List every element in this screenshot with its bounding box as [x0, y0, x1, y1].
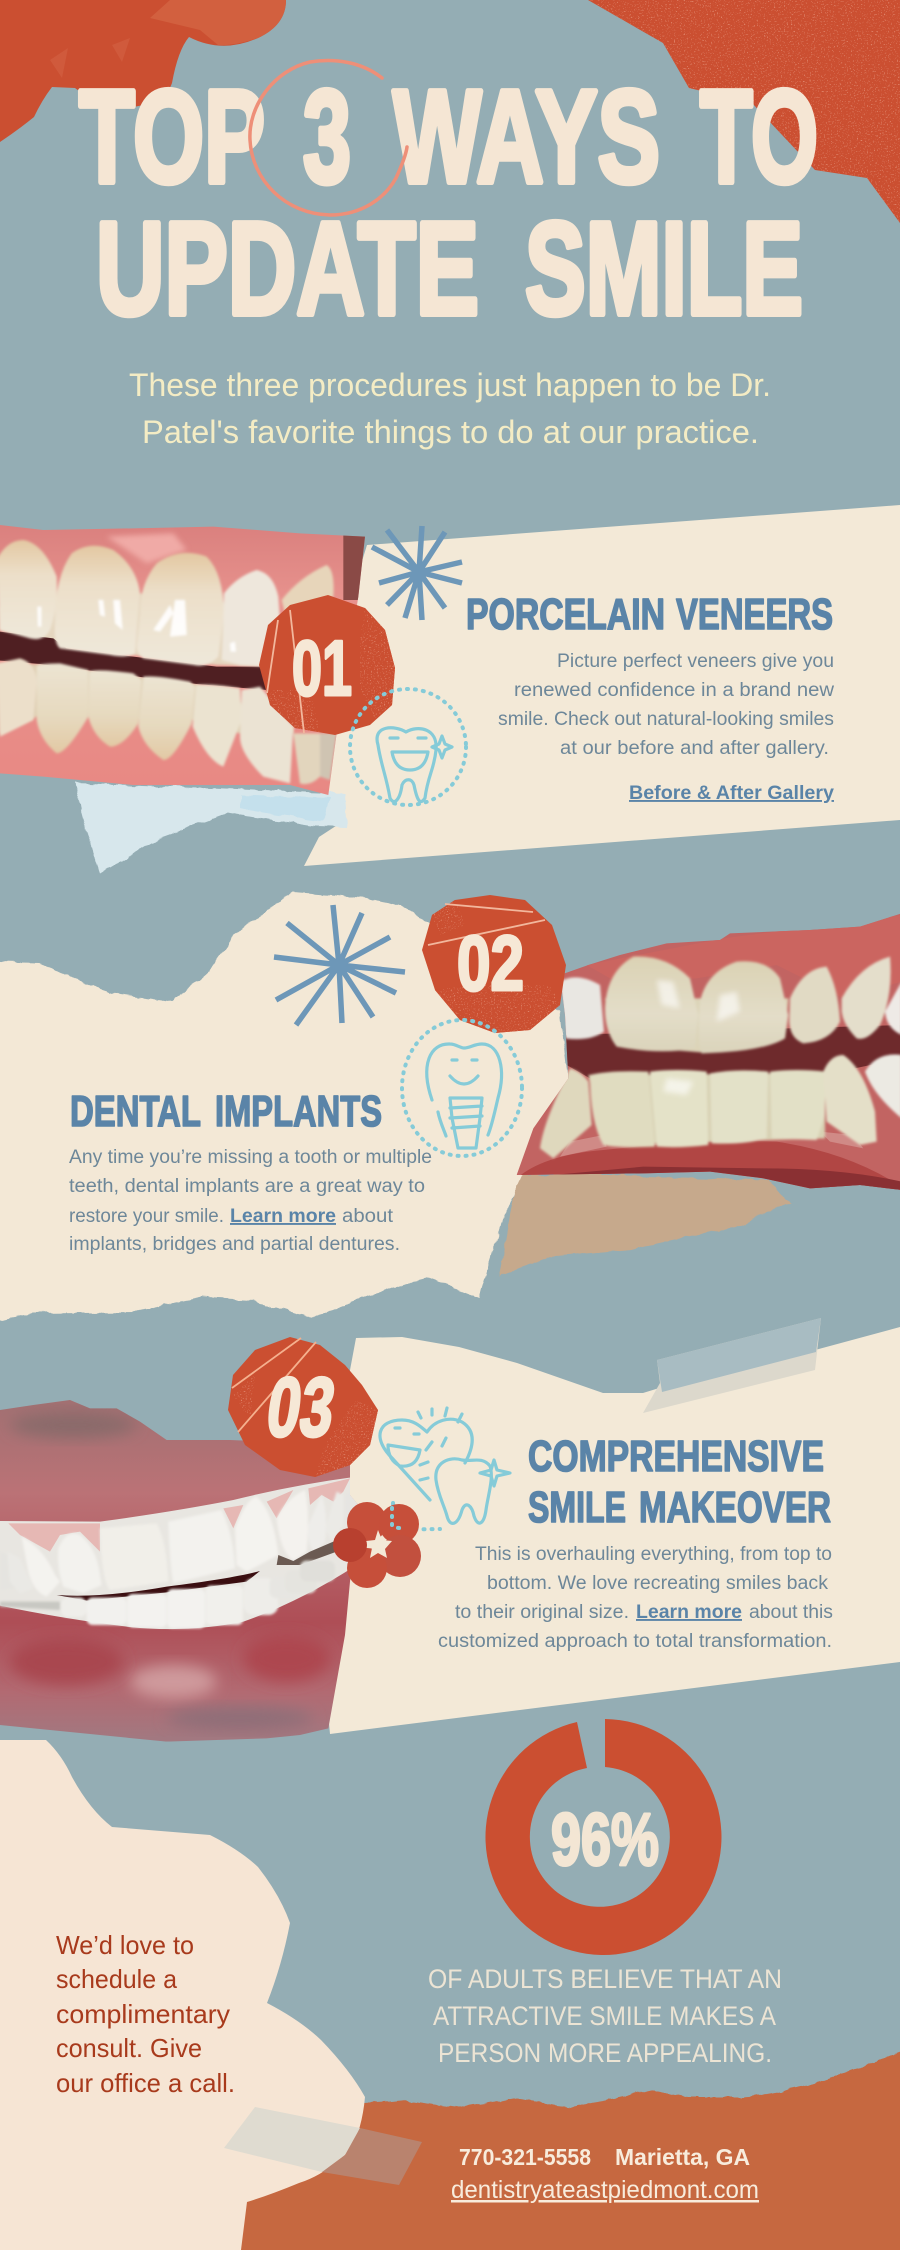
- badge 02: 02: [457, 919, 524, 1007]
- heading: dental implants: [70, 1087, 382, 1136]
- text: veneers body: smile. Check out natural-looking smiles: [498, 709, 834, 730]
- stat caption: OF ADULTS BELIEVE THAT AN: [428, 1964, 782, 1994]
- red torn shape top left: [0, 0, 286, 142]
- text: implants body: [69, 1147, 432, 1255]
- text: makeover body: customized approach to total transformation.: [438, 1631, 832, 1652]
- badge 02: [422, 895, 566, 1033]
- badge 01: [259, 595, 395, 735]
- heading: comprehensive smile makeover: [528, 1432, 831, 1532]
- link: before and after gallery: Before & After Gallery: [629, 783, 834, 804]
- text: veneers body: at our before and after gallery.: [560, 738, 829, 759]
- hand-drawn circle around 3: [250, 61, 407, 215]
- text: call to action: consult. Give: [56, 2033, 202, 2063]
- cream torn paper 2: [0, 892, 568, 1325]
- text: makeover body: Learn more: [636, 1602, 742, 1623]
- text: call to action: complimentary: [56, 1999, 230, 2029]
- text: veneers body: [498, 651, 834, 759]
- contact details: dentistryateastpiedmont.com: [451, 2176, 759, 2204]
- badge 03: [228, 1337, 378, 1477]
- title: TOP: [79, 63, 265, 210]
- text: veneers body: renewed confidence in a brand new: [514, 680, 834, 701]
- cream paper 1: [304, 505, 900, 866]
- subtitle: These three procedures just happen to be Dr.: [129, 367, 771, 403]
- donut chart 96%: 96%: [551, 1798, 659, 1881]
- text: implants body: restore your smile.: [69, 1206, 224, 1227]
- title: [79, 63, 818, 342]
- text: call to action: our office a call.: [56, 2068, 235, 2098]
- icon: smiling tooth: [350, 689, 466, 805]
- torn light blue paper: [75, 783, 347, 873]
- badge 03: 03: [261, 1360, 341, 1454]
- text: call to action: We’d love to: [56, 1930, 194, 1960]
- heading: comprehensive smile makeover: SMILE: [528, 1483, 626, 1532]
- icon: heart and tooth: [380, 1408, 510, 1529]
- stat caption: ATTRACTIVE SMILE MAKES A: [433, 2001, 776, 2031]
- text: makeover body: [438, 1544, 833, 1652]
- badge 01: 01: [292, 624, 352, 712]
- donut chart 96%: [485, 1719, 721, 1955]
- text: call to action: [56, 1930, 235, 2098]
- contact details: 770-321-5558: [459, 2144, 591, 2170]
- text: makeover body: about this: [749, 1602, 833, 1623]
- heading: comprehensive smile makeover: MAKEOVER: [639, 1483, 831, 1532]
- text: makeover body: to their original size.: [455, 1602, 629, 1623]
- orange torn paper footer: [235, 2050, 900, 2250]
- title: WAYS: [393, 63, 660, 210]
- subtitle: [129, 367, 771, 450]
- panel: dental implants: [0, 892, 900, 1325]
- text: implants body: about: [342, 1206, 394, 1227]
- title: UPDATE: [96, 195, 479, 342]
- panel: comprehensive smile makeover: [0, 1318, 900, 1745]
- icon: implant tooth: [402, 1020, 522, 1156]
- stat caption: [428, 1964, 782, 2068]
- photo: implant teeth: [510, 912, 900, 1195]
- masking tape bottom: [224, 2107, 422, 2185]
- photo: smile makeover: [0, 1395, 362, 1745]
- contact details: Marietta, GA: [615, 2144, 750, 2170]
- icon: star burst: [372, 526, 462, 620]
- cream shape with call to action: [0, 1740, 365, 2250]
- text: call to action: schedule a: [56, 1964, 178, 1994]
- red textured shape top right: [588, 0, 900, 223]
- cream torn paper 3: [320, 1327, 900, 1734]
- text: implants body: Any time you’re missing a tooth or multiple: [69, 1147, 432, 1168]
- heading: porcelain veneers: VENEERS: [676, 590, 833, 639]
- stat caption: PERSON MORE APPEALING.: [438, 2038, 772, 2068]
- title: TO: [700, 63, 818, 210]
- title: 3: [303, 63, 351, 210]
- photo: veneers teeth: [0, 520, 368, 800]
- panel: porcelain veneers: [0, 505, 900, 873]
- text: makeover body: This is overhauling everything, from top to: [475, 1544, 832, 1565]
- icon: star burst 2: [274, 905, 405, 1025]
- text: implants body: implants, bridges and partial dentures.: [69, 1234, 400, 1255]
- text: implants body: teeth, dental implants are a great way to: [69, 1176, 425, 1197]
- heading: dental implants: DENTAL: [70, 1087, 201, 1136]
- heading: porcelain veneers: PORCELAIN: [466, 590, 665, 639]
- text: makeover body: bottom. We love recreating smiles back: [487, 1573, 829, 1594]
- flower accent: [333, 1502, 421, 1588]
- text: implants body: Learn more: [230, 1206, 336, 1227]
- text: veneers body: Picture perfect veneers give you: [557, 651, 834, 672]
- kraft paper: [499, 1173, 789, 1277]
- heading: dental implants: IMPLANTS: [215, 1087, 382, 1136]
- masking tape top: [643, 1318, 821, 1413]
- contact details: [451, 2144, 759, 2204]
- subtitle: Patel's favorite things to do at our practice.: [142, 414, 759, 450]
